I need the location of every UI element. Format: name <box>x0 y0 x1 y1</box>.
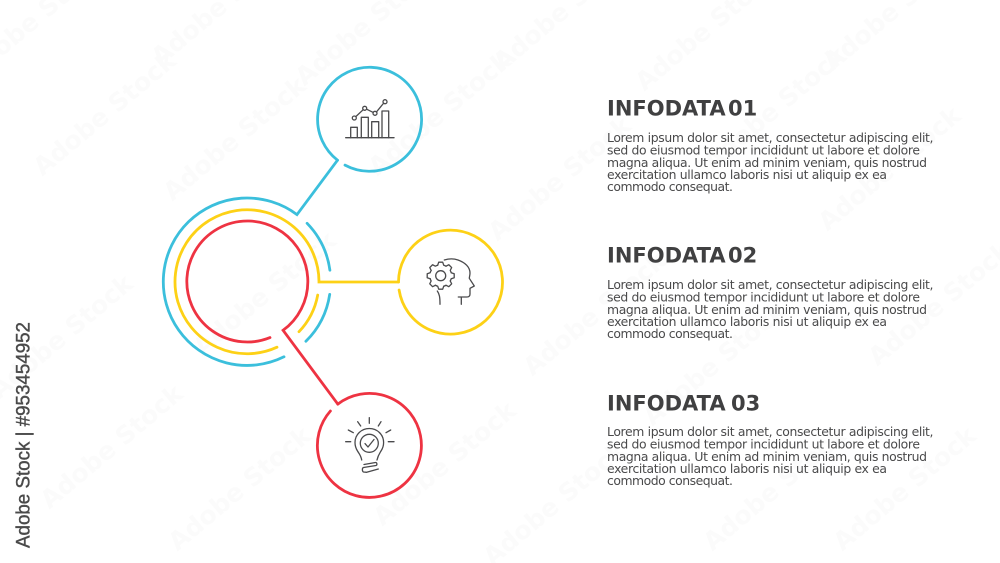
top circle: chart <box>318 67 422 171</box>
icon: light bulb with check <box>346 418 394 472</box>
heading 01: 01 <box>728 96 757 120</box>
body text 01: Lorem ipsum dolor sit amet, consectetur adipiscing elit, <box>607 130 934 145</box>
body text 01: exercitation ullamco laboris nisi ut aliquip ex ea <box>607 167 887 182</box>
body text 01: magna aliqua. Ut enim ad minim veniam, quis nostrud <box>607 155 927 170</box>
body text 03: magna aliqua. Ut enim ad minim veniam, quis nostrud <box>607 449 927 464</box>
heading 03: INFODATA <box>607 392 726 416</box>
info block 03 <box>607 392 937 488</box>
text: Adobe Stock <box>828 420 983 556</box>
middle circle: head with gear <box>398 230 502 334</box>
body text 03: exercitation ullamco laboris nisi ut aliquip ex ea <box>607 461 887 476</box>
icon: bar and line chart <box>346 100 394 138</box>
text: Adobe Stock <box>28 45 183 181</box>
text: Adobe Stock <box>518 245 673 381</box>
text: Adobe Stock <box>363 45 518 181</box>
text: Adobe Stock <box>638 295 793 431</box>
heading 02: 02 <box>728 244 757 268</box>
bottom circle: light bulb <box>317 393 421 497</box>
text: Adobe Stock <box>35 378 190 514</box>
text: Adobe Stock <box>188 225 343 361</box>
text: Adobe Stock <box>163 420 318 556</box>
heading 01: INFODATA <box>607 96 726 120</box>
body text 01: commodo consequat. <box>607 179 733 194</box>
body text 02: exercitation ullamco laboris nisi ut aliquip ex ea <box>607 314 887 329</box>
cyan circle outline <box>318 67 422 171</box>
icon: head with gear <box>427 259 474 304</box>
body text 02: Lorem ipsum dolor sit amet, consectetur adipiscing elit, <box>607 277 934 292</box>
yellow circle outline <box>398 230 502 334</box>
red ring with connector to bottom circle <box>187 221 338 404</box>
text: Adobe Stock <box>813 100 968 236</box>
body text 01: sed do eiusmod tempor incididunt ut labore et dolore <box>607 142 920 158</box>
yellow ring with connector to middle circle <box>175 210 398 354</box>
info block 01 <box>607 96 937 194</box>
body text 02: magna aliqua. Ut enim ad minim veniam, quis nostrud <box>607 302 927 317</box>
heading 02: INFODATA <box>607 244 726 268</box>
body text 03: commodo consequat. <box>607 473 733 488</box>
central concentric rings diagram <box>163 160 398 404</box>
heading 03: 03 <box>731 392 760 416</box>
body text 03: sed do eiusmod tempor incididunt ut labore et dolore <box>607 436 920 452</box>
text: Adobe Stock <box>368 395 523 531</box>
text: Adobe Stock <box>698 420 853 556</box>
body text 02: sed do eiusmod tempor incididunt ut labore et dolore <box>607 290 920 304</box>
info block 02 <box>607 244 937 341</box>
text: Adobe Stock <box>483 110 638 246</box>
cyan ring with connector to top circle <box>163 160 338 365</box>
text: Adobe Stock <box>158 70 313 206</box>
red circle outline <box>317 393 421 497</box>
body text 02: commodo consequat. <box>607 326 733 341</box>
stock id side label: Adobe Stock | #953454952 <box>14 322 34 548</box>
body text 03: Lorem ipsum dolor sit amet, consectetur adipiscing elit, <box>607 424 934 439</box>
text: Adobe Stock <box>698 40 853 176</box>
